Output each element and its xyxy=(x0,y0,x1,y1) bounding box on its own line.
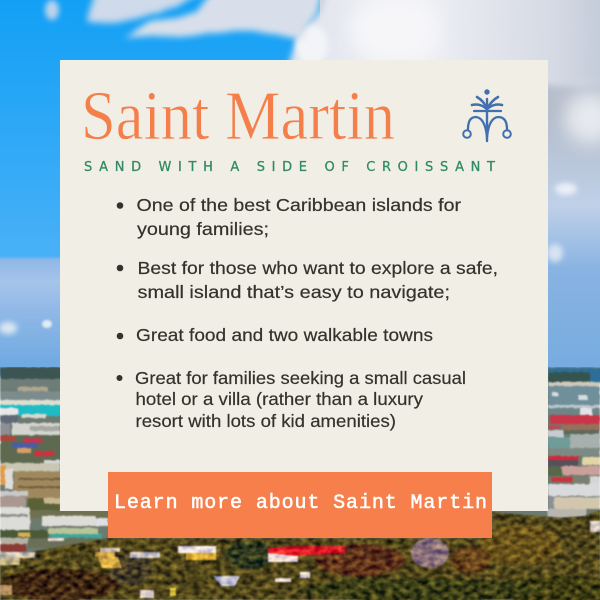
icon: palm fountain xyxy=(463,89,511,141)
town xyxy=(0,367,600,600)
call to action button: Learn more about Saint Martin xyxy=(114,492,487,515)
bullet 1 xyxy=(117,195,461,239)
bullet 2: small island that’s easy to navigate; xyxy=(138,282,450,302)
bullet 1: One of the best Caribbean islands for xyxy=(136,195,461,215)
subtitle tagline: SAND WITH A SIDE OF CROISSANT xyxy=(84,160,495,175)
panel: cream card xyxy=(60,60,548,511)
bullet 1: young families; xyxy=(137,219,269,239)
bullet 3: Great food and two walkable towns xyxy=(136,325,433,345)
foliage xyxy=(0,510,600,600)
top left cloud xyxy=(45,0,325,38)
bullet 4: resort with lots of kid amenities) xyxy=(136,411,396,431)
right side cloud mass xyxy=(290,0,600,375)
bullet 4: hotel or a villa (rather than a luxury xyxy=(136,389,423,409)
bullet 2: Best for those who want to explore a safe, xyxy=(138,258,498,278)
left district xyxy=(0,367,70,379)
distant roofs in the trees xyxy=(0,552,35,558)
marina right xyxy=(548,368,600,384)
bullet 2 xyxy=(117,258,498,302)
bullet 4: Great for families seeking a small casual xyxy=(135,368,466,388)
left hazy horizon clouds xyxy=(0,258,80,378)
call to action button xyxy=(108,472,492,538)
title: Saint Martin xyxy=(81,78,395,155)
blue sky xyxy=(0,0,600,375)
bullet list xyxy=(116,195,498,431)
bullet 4 xyxy=(116,368,466,431)
